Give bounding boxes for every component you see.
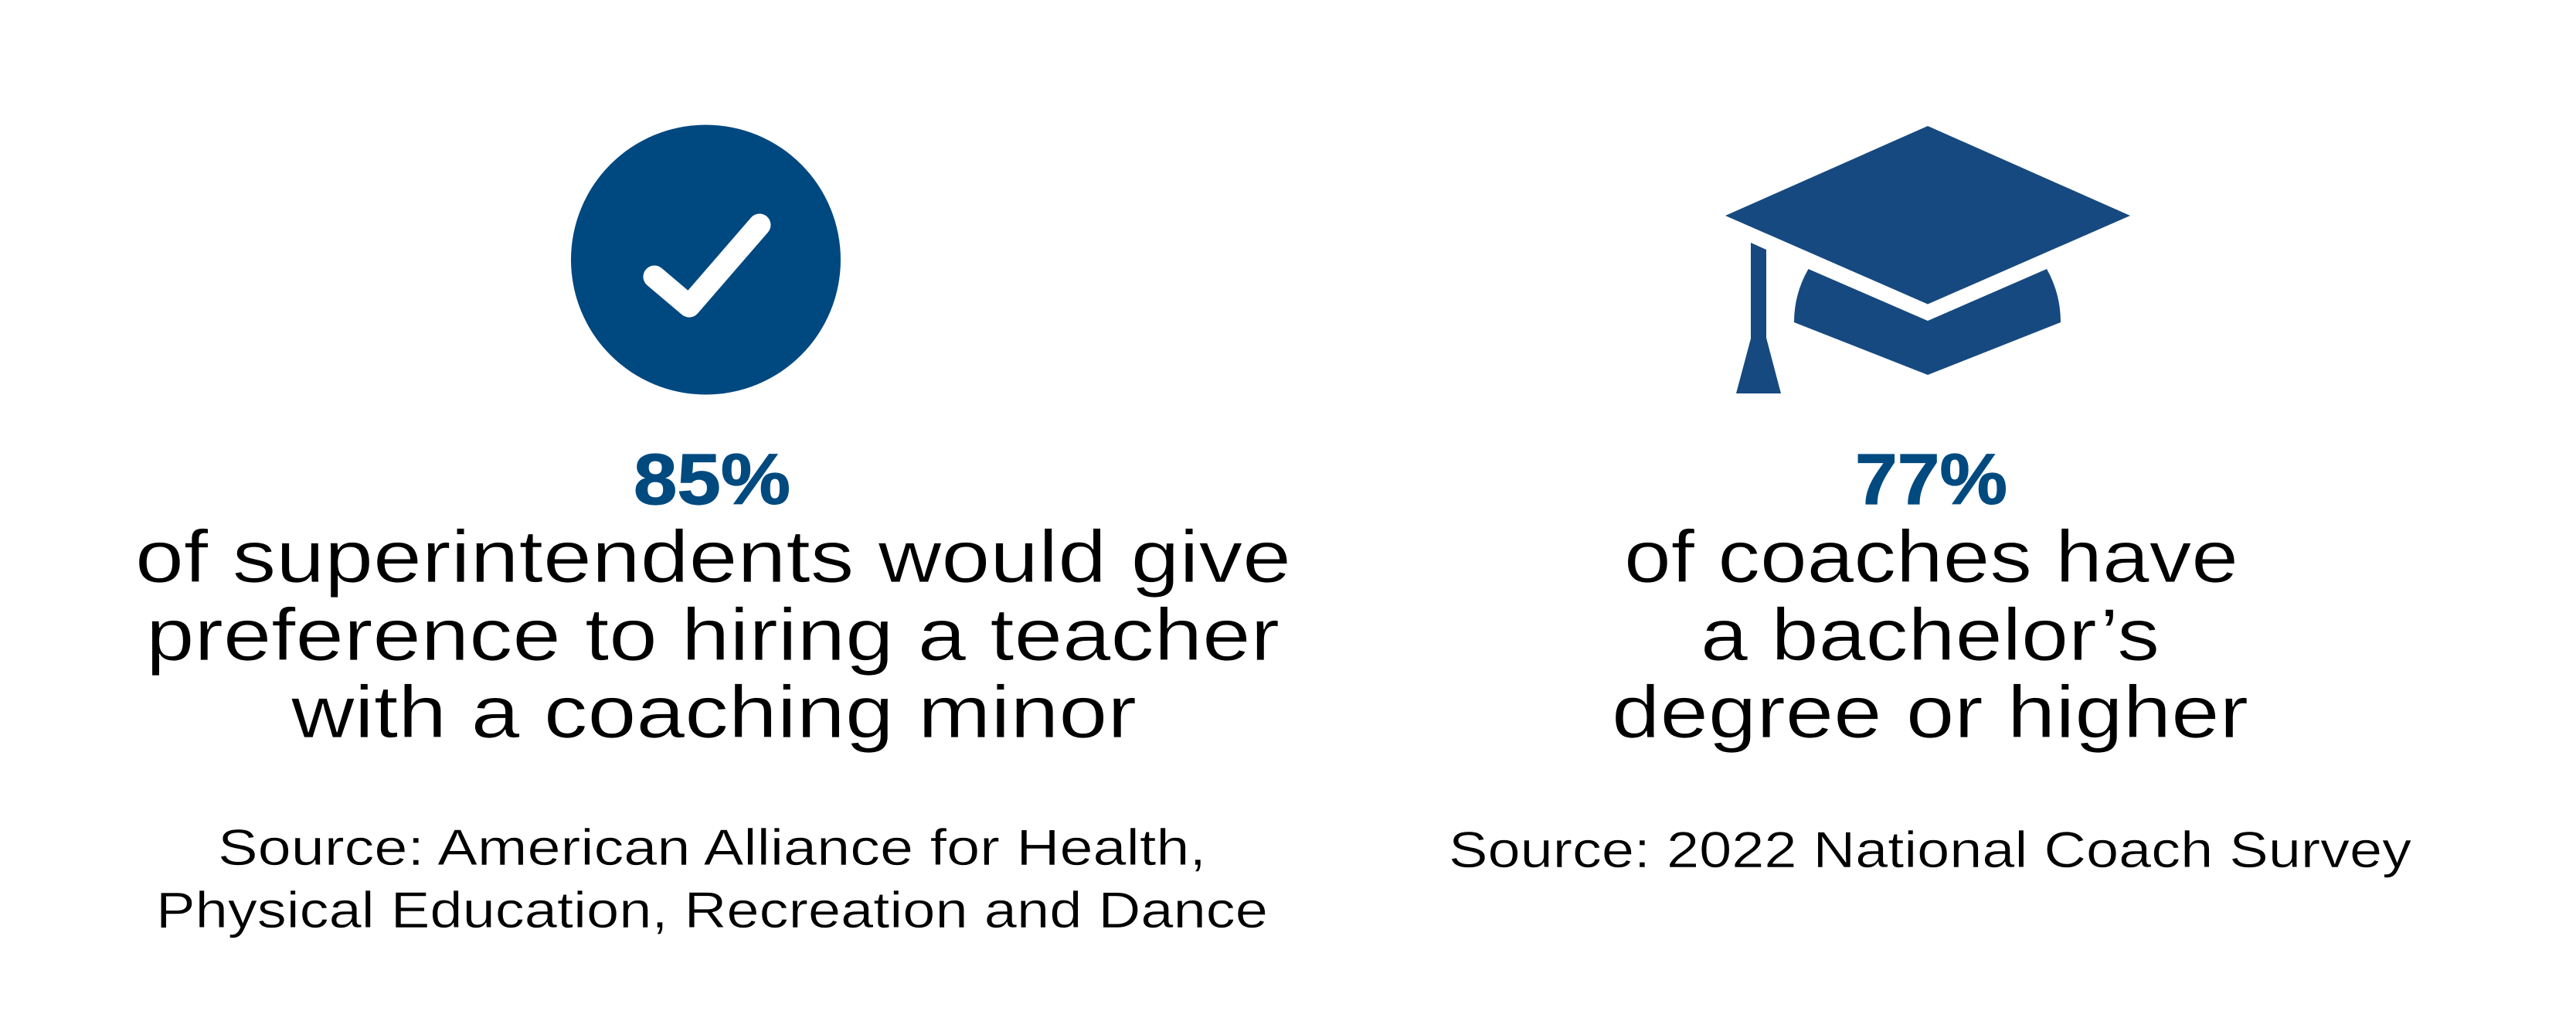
- text block: coaches description: of coaches have: [1624, 516, 2238, 598]
- statistic: 85%: 85%: [634, 439, 790, 519]
- panel: coaches statistic: [1449, 126, 2411, 878]
- icon: check mark in circle: [571, 125, 841, 394]
- icon: graduation cap: [1725, 126, 2130, 393]
- text block: superintendents description: [135, 516, 1291, 754]
- text block: coaches description: degree or higher: [1612, 671, 2248, 754]
- source: American Alliance: Physical Education, Recreation and Dance: [156, 881, 1268, 938]
- text block: superintendents description: preference to hiring a teacher: [146, 594, 1280, 676]
- text block: coaches description: a bachelor’s: [1701, 594, 2160, 676]
- source: American Alliance: [156, 819, 1268, 938]
- source: American Alliance: Source: American Alliance for Health,: [218, 819, 1206, 876]
- statistic: 77%: 77%: [1855, 439, 2007, 519]
- panel: superintendents statistic: [135, 125, 1291, 938]
- text block: coaches description: [1612, 516, 2248, 754]
- text block: superintendents description: with a coaching minor: [291, 671, 1137, 754]
- source: 2022 National Coach Survey: Source: 2022 National Coach Survey: [1449, 821, 2411, 878]
- text block: superintendents description: of superintendents would give: [135, 516, 1291, 598]
